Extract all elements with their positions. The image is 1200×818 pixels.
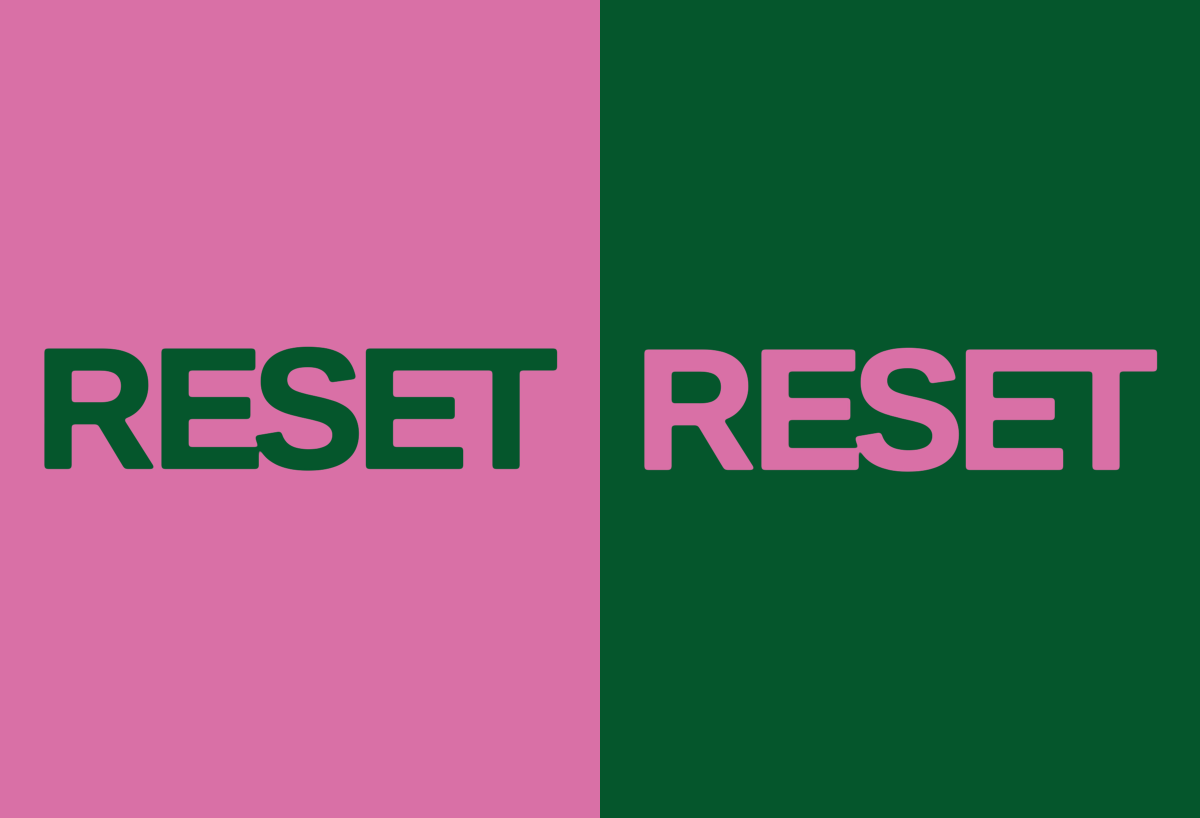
heading: pink RESET on green: RESET	[635, 314, 1157, 505]
heading: green RESET on pink: RESET	[35, 313, 557, 504]
panel: pink left background	[0, 0, 600, 818]
panel: green right background	[600, 0, 1200, 818]
